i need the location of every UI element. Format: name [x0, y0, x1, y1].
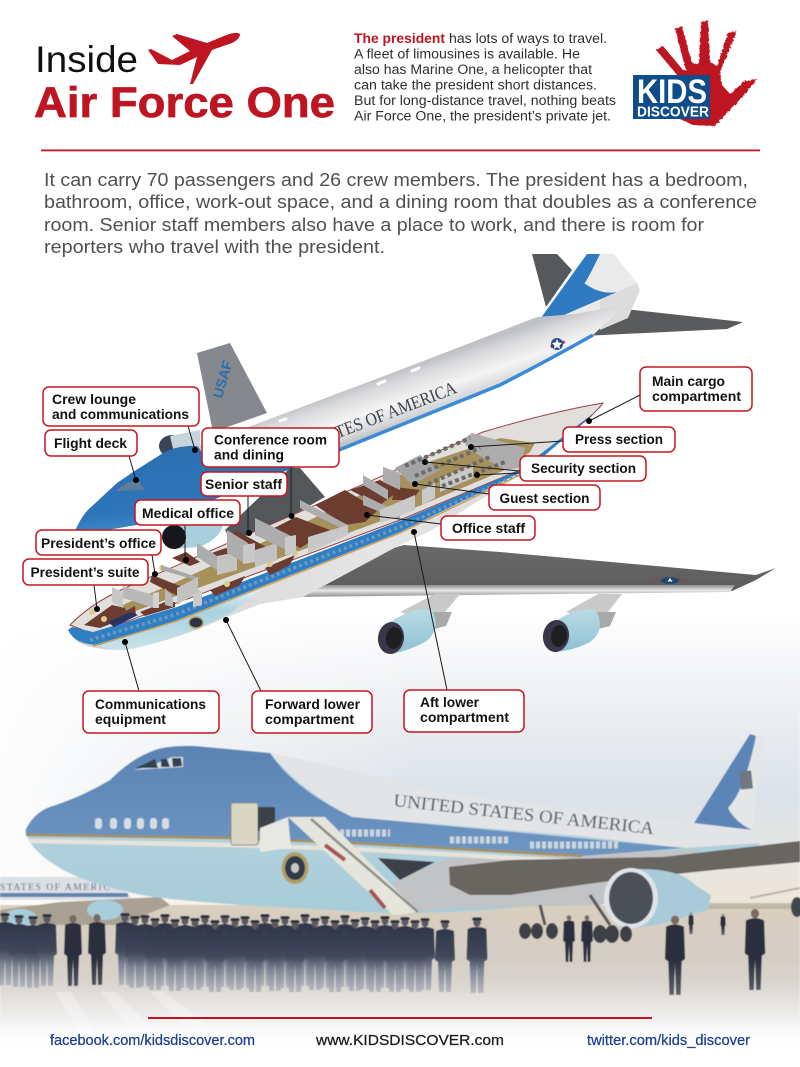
label: crew lounge and communications	[43, 387, 199, 453]
wing	[449, 841, 800, 895]
body text: room. Senior staff members also have a place to work, and there is room for	[44, 214, 704, 235]
roundel	[550, 338, 565, 350]
label: flight deck	[45, 430, 139, 483]
belly	[95, 585, 268, 650]
cabin walls	[112, 433, 525, 608]
label: aft lower compartment: Aft lower	[420, 695, 480, 710]
label: aft lower compartment: compartment	[420, 710, 510, 725]
intro paragraph: the president: But for long-distance travel, nothing beats	[354, 93, 616, 108]
label: guest section	[412, 481, 600, 510]
title	[34, 39, 335, 127]
small windows	[280, 368, 419, 421]
press and guest seats	[405, 438, 505, 486]
label: communications equipment: Communications	[95, 697, 206, 712]
label: guest section: Guest section	[500, 491, 590, 506]
cockpit windows	[115, 482, 145, 491]
label: crew lounge and communications: Crew lounge	[52, 392, 137, 407]
rear dark stabilizer	[532, 254, 572, 307]
lower shell	[72, 475, 520, 650]
window row	[90, 474, 520, 640]
presidential seal small	[189, 617, 203, 628]
label: main cargo compartment: Main cargo	[652, 374, 725, 389]
lamps	[89, 550, 298, 622]
helicopter and distant staff	[750, 888, 800, 917]
label: medical office: Medical office	[142, 506, 234, 521]
label: conference room and dining: Conference room	[214, 432, 327, 448]
label: president's suite	[23, 559, 148, 612]
title: Inside	[35, 39, 138, 80]
label: medical office	[135, 500, 240, 563]
intro paragraph: the president: Air Force One, the president’s private jet.	[354, 108, 611, 124]
footer links: www.KIDSDISCOVER.com	[315, 1033, 504, 1049]
state text on fuselage: STATES OF AMERICA	[307, 378, 459, 452]
tail fin	[538, 254, 640, 330]
front engine	[162, 520, 223, 549]
label: forward lower compartment: compartment	[265, 712, 355, 727]
engine	[604, 868, 711, 928]
label: forward lower compartment	[223, 617, 372, 733]
rear engine	[159, 430, 200, 457]
fairing behind wing	[395, 850, 700, 911]
label: press section	[468, 427, 675, 452]
label: communications equipment	[83, 639, 219, 733]
tail fin	[694, 734, 764, 830]
background plane	[0, 877, 170, 927]
intro paragraph: the president: A fleet of limousines is available. He	[354, 46, 580, 62]
body text: It can carry 70 passengers and 26 crew members. The president has a bedroom,	[44, 169, 748, 190]
label: press section: Press section	[575, 432, 663, 447]
label: flight deck: Flight deck	[54, 436, 127, 451]
engine 2	[541, 594, 622, 654]
intro paragraph: the president: The president	[354, 31, 446, 46]
title: Air Force One	[34, 79, 335, 127]
background plane: STATES OF AMERIC	[0, 883, 110, 893]
ground shadows	[55, 992, 220, 1040]
gold stripe	[93, 470, 530, 646]
label: security section	[422, 456, 646, 481]
interior shell	[70, 403, 603, 634]
honor guard crowd	[0, 909, 765, 995]
USAF stabilizer	[197, 343, 267, 432]
label: president's office: President’s office	[41, 536, 156, 551]
divider	[41, 150, 760, 151]
footer links	[50, 1033, 750, 1049]
dark wing root	[225, 468, 325, 548]
body text: reporters who travel with the president.	[44, 236, 385, 257]
label: office staff	[364, 512, 535, 540]
footer links: twitter.com/kids_discover	[587, 1033, 750, 1049]
door and stairs	[231, 803, 435, 915]
label: president's office	[36, 530, 161, 577]
bed	[108, 612, 138, 627]
icon: red airplane	[148, 33, 240, 84]
photo: Air Force One on the tarmac	[0, 600, 800, 1050]
label: crew lounge and communications: and communications	[52, 407, 189, 422]
floor	[100, 438, 535, 624]
label: forward lower compartment: Forward lower	[265, 697, 361, 712]
label: senior staff: Senior staff	[205, 477, 283, 492]
label: aft lower compartment	[404, 529, 524, 732]
body text: bathroom, office, work-out space, and a dining room that doubles as a conference	[44, 191, 757, 212]
right stabilizer	[583, 309, 743, 336]
logo: Kids Discover hand: KIDS	[637, 73, 707, 111]
wing roundel	[652, 577, 688, 584]
landing gear	[519, 895, 632, 943]
USAF stabilizer: USAF	[210, 358, 236, 400]
intro paragraph: the president	[354, 31, 616, 124]
main plane fuselage: UNITED STATES OF AMERICA	[393, 790, 655, 838]
main plane fuselage	[26, 746, 760, 913]
blue band	[68, 405, 603, 645]
main wing	[281, 545, 776, 597]
label: security section: Security section	[531, 461, 636, 476]
label: senior staff	[201, 472, 287, 536]
label: president's suite: President’s suite	[30, 565, 140, 580]
logo: Kids Discover hand	[633, 20, 757, 126]
label: conference room and dining: and dining	[214, 448, 284, 462]
body text	[44, 169, 757, 257]
cutaway fuselage	[68, 403, 603, 650]
label: conference room and dining	[202, 428, 339, 519]
intro paragraph: the president: has lots of ways to travel.	[449, 31, 607, 46]
engine 1	[376, 594, 460, 656]
presidential seal	[282, 852, 308, 884]
label: office staff: Office staff	[452, 521, 526, 536]
furniture	[84, 480, 420, 628]
fuselage	[190, 305, 625, 497]
footer links: facebook.com/kidsdiscover.com	[50, 1033, 255, 1049]
blue nose	[75, 446, 295, 532]
label: main cargo compartment	[586, 367, 752, 424]
label: communications equipment: equipment	[95, 712, 167, 727]
logo: Kids Discover hand: DISCOVER	[637, 104, 709, 120]
intro paragraph: the president: can take the president short distances.	[354, 78, 597, 92]
exterior plane top half	[75, 254, 743, 549]
footer rule	[148, 1017, 652, 1019]
intro paragraph: the president: also has Marine One, a helicopter that	[354, 62, 592, 77]
label: main cargo compartment: compartment	[652, 389, 742, 404]
